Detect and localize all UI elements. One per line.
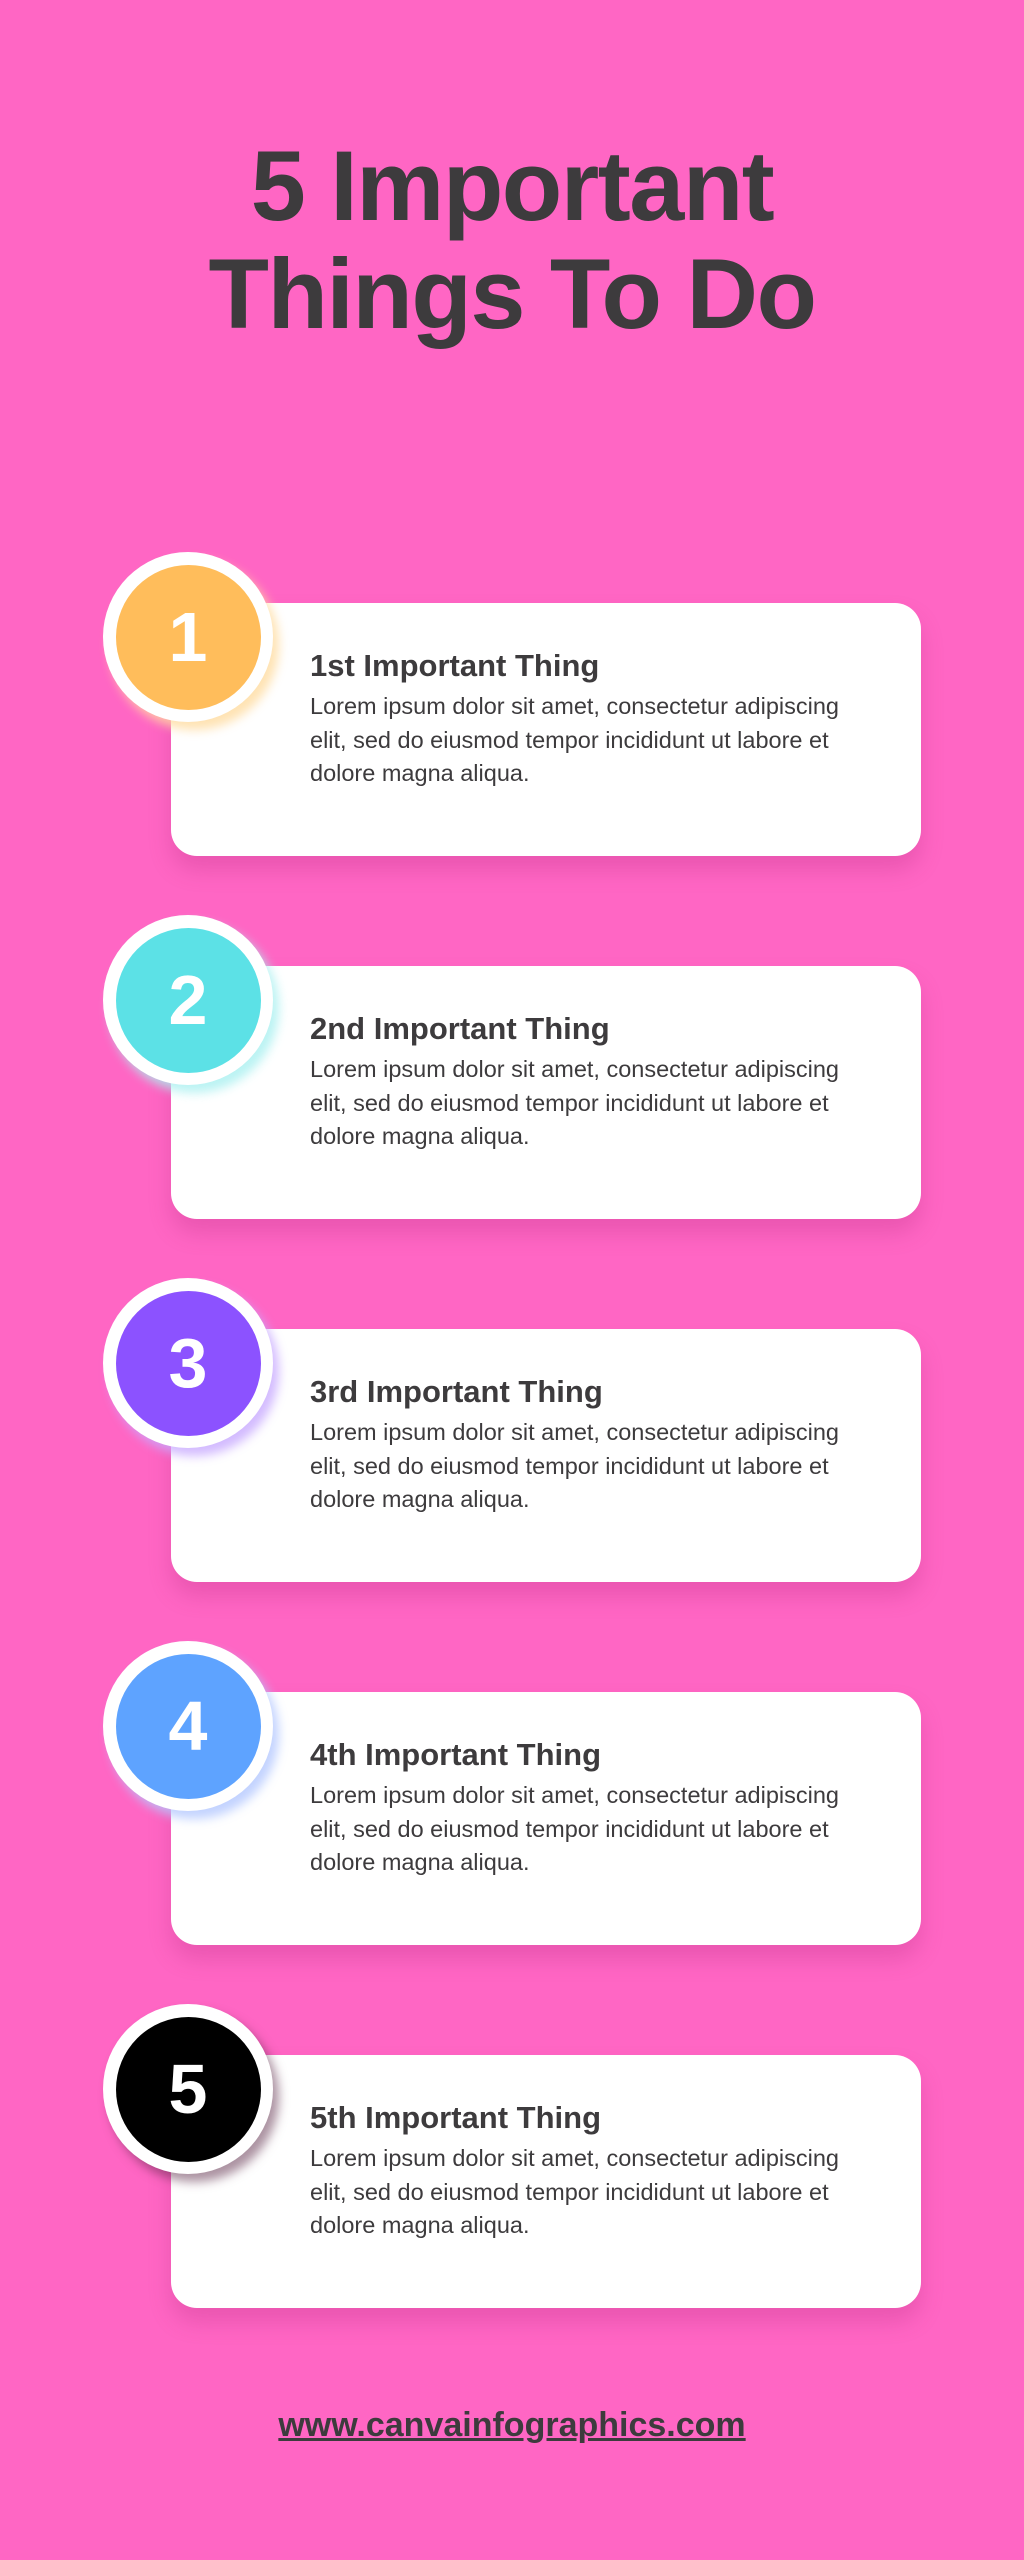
panel: item 1: elit, sed do eiusmod tempor incididunt ut labore et [310, 726, 829, 752]
panel: item 3: elit, sed do eiusmod tempor incididunt ut labore et [310, 1452, 829, 1478]
panel: item 4: 4th Important Thing [310, 1737, 601, 1772]
panel: item 3: Lorem ipsum dolor sit amet, consectetur adipiscing [310, 1419, 839, 1445]
panel: item 4: dolore magna aliqua. [310, 1849, 530, 1875]
panel: item 5: Lorem ipsum dolor sit amet, consectetur adipiscing [310, 2145, 839, 2171]
panel: item 3: dolore magna aliqua. [310, 1486, 530, 1512]
icon: number 4 [103, 1641, 273, 1811]
panel: item 3 [171, 1329, 921, 1582]
panel: item 2: Lorem ipsum dolor sit amet, consectetur adipiscing [310, 1056, 839, 1082]
panel: item 5: elit, sed do eiusmod tempor incididunt ut labore et [310, 2178, 829, 2204]
icon: number 2: 2 [169, 961, 207, 1039]
panel: item 4: Lorem ipsum dolor sit amet, consectetur adipiscing [310, 1782, 839, 1808]
panel: item 2: 2nd Important Thing [310, 1011, 610, 1046]
icon: number 2 [103, 915, 273, 1085]
icon: number 5 [103, 2004, 273, 2174]
icon: number 3 [103, 1278, 273, 1448]
panel: item 3: 3rd Important Thing [310, 1374, 603, 1409]
title: Things To Do [208, 238, 816, 349]
panel: item 1 [171, 603, 921, 856]
panel: item 2: dolore magna aliqua. [310, 1123, 530, 1149]
panel: item 4: elit, sed do eiusmod tempor incididunt ut labore et [310, 1816, 829, 1842]
panel: item 2 [171, 966, 921, 1219]
icon: number 5: 5 [169, 2050, 207, 2128]
icon: number 1: 1 [169, 598, 207, 676]
panel: item 5: dolore magna aliqua. [310, 2212, 530, 2238]
panel: item 2: elit, sed do eiusmod tempor incididunt ut labore et [310, 1090, 829, 1116]
icon: number 3: 3 [169, 1324, 207, 1402]
panel: item 1: Lorem ipsum dolor sit amet, consectetur adipiscing [310, 693, 839, 719]
title [208, 130, 816, 349]
panel: item 5: 5th Important Thing [310, 2100, 601, 2135]
panel: item 1: dolore magna aliqua. [310, 760, 530, 786]
panel: item 5 [171, 2055, 921, 2308]
footer url: www.canvainfographics.com [278, 2406, 746, 2444]
icon: number 1 [103, 552, 273, 722]
icon: number 4: 4 [169, 1687, 207, 1765]
panel: item 1: 1st Important Thing [310, 648, 599, 683]
title: 5 Important [251, 130, 773, 241]
panel: item 4 [171, 1692, 921, 1945]
